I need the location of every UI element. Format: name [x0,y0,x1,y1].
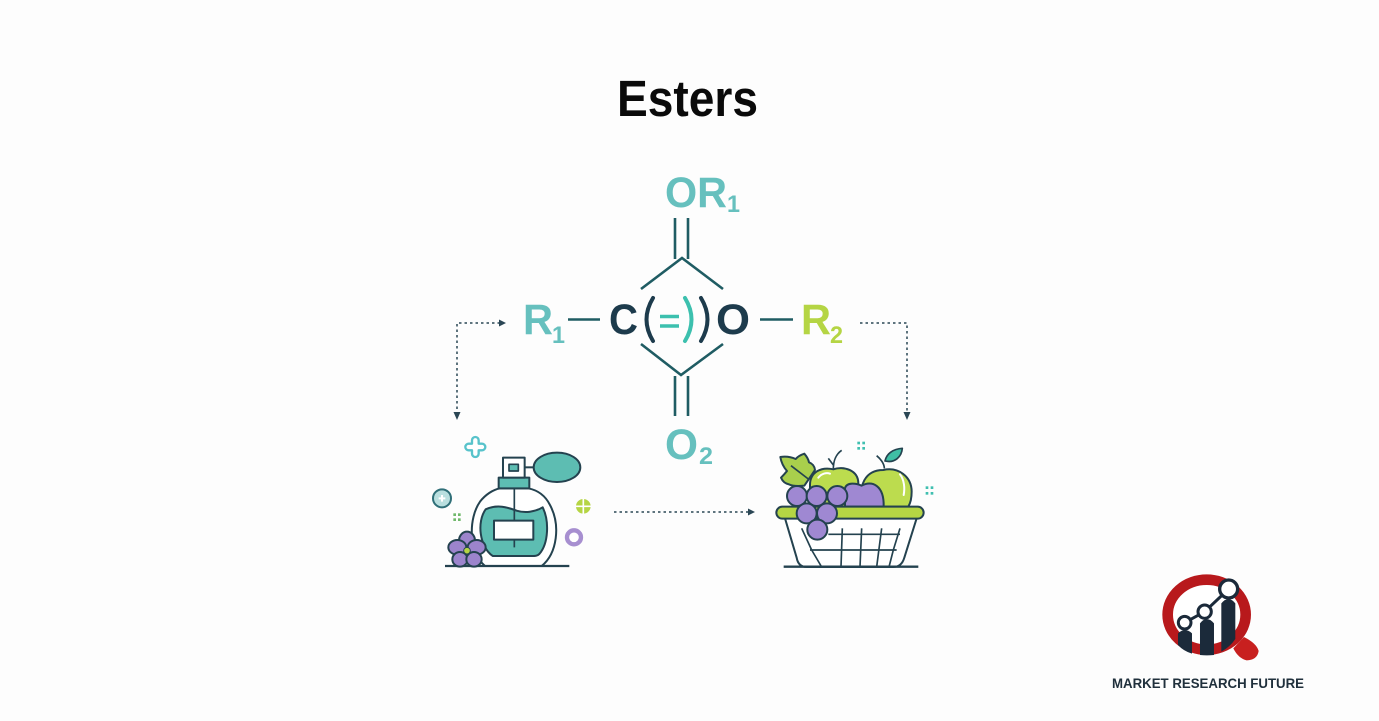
label: R2 [801,296,843,349]
label: OR1: OR [665,169,727,217]
arrow: R1 to perfume [454,320,506,420]
icon: fruit basket [776,442,933,567]
logo text: MARKET RESEARCH FUTURE [1112,675,1304,691]
apple 1 [810,468,858,507]
logo mark [1168,580,1259,660]
label: O2 [665,421,713,470]
label: R1: R [523,296,553,344]
label: O2: 2 [699,443,713,470]
label: R2: R [801,296,831,344]
label: R2: 2 [830,322,843,349]
label: O2: O [665,421,698,469]
label: OR1: 1 [727,191,740,218]
bond O to R2 [760,318,793,321]
purple apple [845,484,884,507]
grapes [787,486,847,540]
label: R1: 1 [552,322,565,349]
sparkles [857,442,933,495]
arrow: perfume to fruit [614,508,755,516]
flower [448,532,486,567]
bond R1 to C [568,318,600,321]
bottom double bond [641,344,723,416]
logo: Market Research Future [1112,580,1304,691]
chemical formula diagram [523,169,843,470]
leaf [780,454,815,486]
central atoms C(=))O: O [716,296,750,344]
central atoms C(=))O [609,296,750,344]
title: Esters [617,70,758,127]
basket [785,518,917,567]
top double bond [641,218,723,289]
label: R1 [523,296,565,349]
central atoms C(=))O: C [609,296,638,344]
apple 2 [861,469,912,507]
icon: perfume bottle [433,437,591,567]
arrow: R2 to fruit [860,323,910,420]
sparkles [465,437,485,457]
